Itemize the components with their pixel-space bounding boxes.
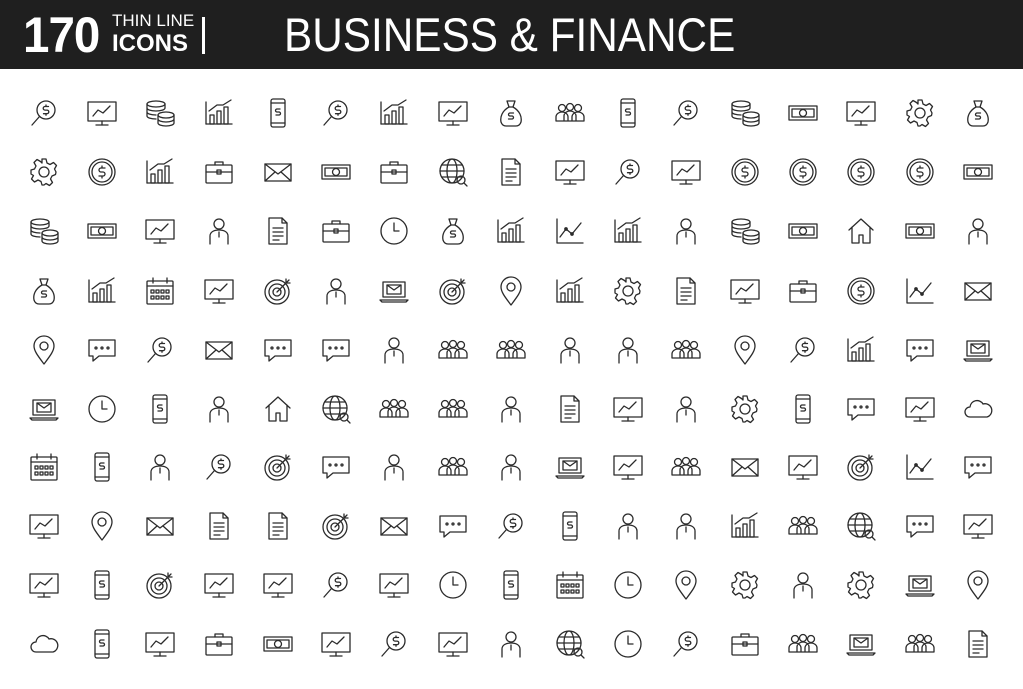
- icon: laptop search: [847, 635, 875, 655]
- icon: headset: [151, 455, 169, 480]
- icon: line chart: [907, 279, 933, 303]
- icon: briefcase: [790, 281, 816, 302]
- icon: handshake: [672, 340, 700, 358]
- icon: presentation: [614, 398, 642, 421]
- icon: cloud: [965, 401, 992, 417]
- icon: monitor chart: [88, 102, 116, 125]
- icon: search dollar: [324, 101, 347, 125]
- icon: coins cash: [31, 219, 58, 244]
- icon: dollar cycle: [848, 278, 874, 304]
- icon: open mail: [147, 518, 173, 535]
- icon: money bag hand: [968, 101, 988, 126]
- icon: email dollar: [381, 518, 407, 535]
- subtitle thin line: THIN LINE: [112, 11, 194, 30]
- subtitle icons: ICONS: [112, 30, 188, 57]
- icon: monitor bars: [847, 102, 875, 125]
- icon: search growth: [674, 632, 697, 656]
- icon: dollar up: [677, 278, 695, 304]
- icon: mobile check: [95, 630, 109, 658]
- icon: bank: [849, 219, 873, 243]
- icon: document: [269, 218, 287, 244]
- icon: banknote: [964, 165, 992, 179]
- icon: camera: [30, 574, 58, 597]
- icon: idea bulb: [501, 277, 521, 305]
- icon: target: [440, 279, 465, 304]
- icon: browser chart: [789, 456, 817, 479]
- icon: 24 hours: [615, 631, 641, 657]
- icon: laptop mail: [30, 400, 58, 420]
- icon: workplace: [385, 455, 403, 480]
- icon: map pin: [34, 336, 54, 364]
- icon: money brain: [732, 572, 758, 598]
- icon: monitor growth: [146, 220, 174, 243]
- icon: timer: [615, 572, 641, 598]
- icon: falling bars: [206, 100, 232, 124]
- icon: globe: [848, 513, 875, 540]
- icon: search chart: [616, 160, 639, 184]
- icon: laptop: [906, 576, 934, 596]
- icon: hierarchy: [439, 400, 467, 417]
- icon: money cycle: [789, 224, 817, 238]
- icon: gear: [732, 396, 758, 422]
- icon: gear: [907, 100, 932, 126]
- icon: businessman: [619, 338, 637, 363]
- icon: megaphone: [848, 399, 874, 420]
- icon: puzzle team: [789, 634, 817, 652]
- icon: team: [556, 104, 584, 121]
- icon: brain cloud: [31, 636, 58, 652]
- icon: globe: [323, 396, 350, 423]
- icon: laptop search: [380, 282, 408, 302]
- icon: network people: [906, 634, 934, 652]
- icon: percent hand: [677, 219, 695, 244]
- icon: stopwatch: [381, 218, 407, 244]
- icon: presenter: [210, 219, 228, 244]
- icon: gears: [615, 278, 640, 304]
- row 8: [30, 512, 992, 540]
- icon: coins: [732, 219, 759, 244]
- icon: search dollar: [32, 101, 55, 125]
- icon: user: [210, 397, 228, 422]
- icon: network: [380, 400, 408, 417]
- title: BUSINESS & FINANCE: [284, 8, 735, 61]
- icon: laptop image: [964, 341, 992, 361]
- icon: wifi: [147, 573, 172, 598]
- icon: growth chart: [498, 218, 524, 242]
- icon: calendar: [557, 572, 583, 598]
- icon: open box: [732, 634, 758, 655]
- row 2: [31, 159, 992, 186]
- icon: dollar hand: [619, 514, 637, 539]
- icon: smartphone: [153, 395, 167, 423]
- icon: teamwork cycle: [439, 458, 467, 475]
- icon: leader flag: [561, 338, 579, 363]
- row 6: [30, 395, 992, 423]
- icon: report monitor: [439, 102, 467, 125]
- icon: cursor: [324, 573, 347, 597]
- icon: report: [502, 159, 520, 185]
- icon: presentation: [672, 161, 700, 184]
- icon: chat: [965, 457, 991, 478]
- icon: investor: [502, 397, 520, 422]
- icon: briefcase: [381, 162, 407, 183]
- icon: cctv camera: [206, 634, 232, 655]
- icon: global search: [440, 159, 467, 186]
- icon: wifi: [323, 514, 348, 539]
- icon: person: [385, 338, 403, 363]
- icon: phone handset: [89, 340, 115, 361]
- icon: growth bars: [381, 100, 407, 124]
- icon: stopwatch: [440, 572, 466, 598]
- icon: checklist: [561, 396, 579, 422]
- icon: smartwatch: [95, 571, 109, 599]
- icon: dollar hand: [327, 279, 345, 304]
- row 10: [31, 630, 987, 658]
- row 1: [32, 99, 988, 127]
- icon: at sign: [265, 455, 290, 480]
- icon: home: [266, 397, 290, 421]
- icon: dollar chat: [440, 516, 466, 537]
- icon: presentation board: [205, 280, 233, 303]
- icon: envelope: [732, 459, 758, 476]
- icon: email dollar: [265, 164, 291, 181]
- icon: chat: [323, 340, 349, 361]
- icon: mobile analytics: [621, 99, 635, 127]
- icon: calendar: [31, 454, 57, 480]
- icon: email dollar: [965, 283, 991, 300]
- icon: chat bubbles: [907, 340, 933, 361]
- icon: microphone: [95, 453, 109, 481]
- icon: checklist edit: [269, 513, 287, 539]
- row 5: [34, 336, 992, 364]
- icon: dollar person: [677, 397, 695, 422]
- icon: clipboard check: [969, 631, 987, 657]
- icon: dollar coin: [732, 159, 758, 185]
- icon: global search: [557, 631, 584, 658]
- icon: euro coin: [790, 159, 816, 185]
- icon: speaker: [677, 514, 695, 539]
- icon: megaphone: [323, 457, 349, 478]
- icon: notebook: [210, 513, 228, 539]
- icon: bar search: [615, 218, 641, 242]
- icon: credit card: [906, 224, 934, 238]
- icon: smartphone: [796, 395, 810, 423]
- icon: speaker chat: [794, 573, 812, 598]
- icon: currency exchange: [147, 101, 174, 126]
- icon: idea brain: [676, 571, 696, 599]
- icon: message: [265, 340, 291, 361]
- icon: router: [264, 637, 292, 651]
- icon: search user: [207, 455, 230, 479]
- icon: location: [968, 571, 988, 599]
- icon: money bag: [34, 279, 54, 304]
- icon: devices: [205, 574, 233, 597]
- icon: search: [791, 338, 814, 362]
- icon: online presentation: [614, 456, 642, 479]
- row 3: [31, 218, 987, 244]
- icon: window: [264, 574, 292, 597]
- icon: two people: [439, 340, 467, 358]
- icon: leader team: [672, 458, 700, 475]
- icon: cash stack: [789, 106, 817, 120]
- icon: dollar hand: [969, 219, 987, 244]
- icon: mobile dollar: [563, 512, 577, 540]
- icon: gavel: [323, 221, 349, 242]
- icon: location user: [92, 512, 112, 540]
- row 4: [34, 277, 991, 305]
- icon: growth bars: [89, 278, 115, 302]
- icon: money exchange: [88, 224, 116, 238]
- icon: browser chart: [556, 161, 584, 184]
- icon: brain: [848, 572, 874, 598]
- icon: laptop growth: [556, 458, 584, 478]
- icon: smartphone: [504, 571, 518, 599]
- icon: target: [265, 279, 290, 304]
- icon: percent up: [443, 219, 463, 244]
- icon: search dollar: [499, 514, 522, 538]
- icon: gear: [31, 159, 56, 186]
- icon: line chart: [907, 455, 933, 479]
- row 9: [30, 571, 988, 599]
- icon: growth: [848, 337, 874, 361]
- icon: check badge: [89, 159, 115, 185]
- icon: www search: [382, 632, 405, 656]
- icon: analysis search: [674, 101, 697, 125]
- icon: bars: [557, 278, 583, 302]
- icon: calculator: [147, 278, 173, 304]
- row 7: [31, 453, 991, 481]
- icon: browser search: [906, 398, 934, 421]
- icon: thumbs up: [502, 632, 520, 657]
- icon: browser gears: [731, 280, 759, 303]
- icon: monitor list: [146, 633, 174, 656]
- icon: browser: [964, 515, 992, 538]
- icon: yen coin: [848, 159, 874, 185]
- icon: bitcoin: [907, 159, 933, 185]
- icon: team: [789, 516, 817, 534]
- icon: envelope: [206, 342, 232, 359]
- icon: bar chart: [147, 159, 173, 183]
- icon: target: [848, 455, 873, 480]
- header bar: [0, 0, 1023, 69]
- icon: phone: [907, 516, 933, 537]
- icon: browser: [30, 515, 58, 538]
- icon: monitor: [380, 574, 408, 597]
- icon: dollar growth: [557, 219, 583, 243]
- icon: search: [148, 338, 171, 362]
- count 170: 170: [23, 7, 99, 63]
- icon: coins: [732, 101, 759, 126]
- icon: clock: [89, 396, 115, 422]
- vertical separator: [202, 17, 205, 54]
- icon: success person: [502, 455, 520, 480]
- icon: money bag: [501, 101, 521, 126]
- icon: monitor search: [439, 633, 467, 656]
- icon: banknote: [322, 165, 350, 179]
- icon: wallet: [206, 162, 232, 183]
- icon: group: [497, 340, 525, 358]
- icon: mobile dollar: [271, 99, 285, 127]
- icon: tag: [735, 336, 755, 364]
- icon: browser page: [322, 633, 350, 656]
- icon: bars: [732, 513, 758, 537]
